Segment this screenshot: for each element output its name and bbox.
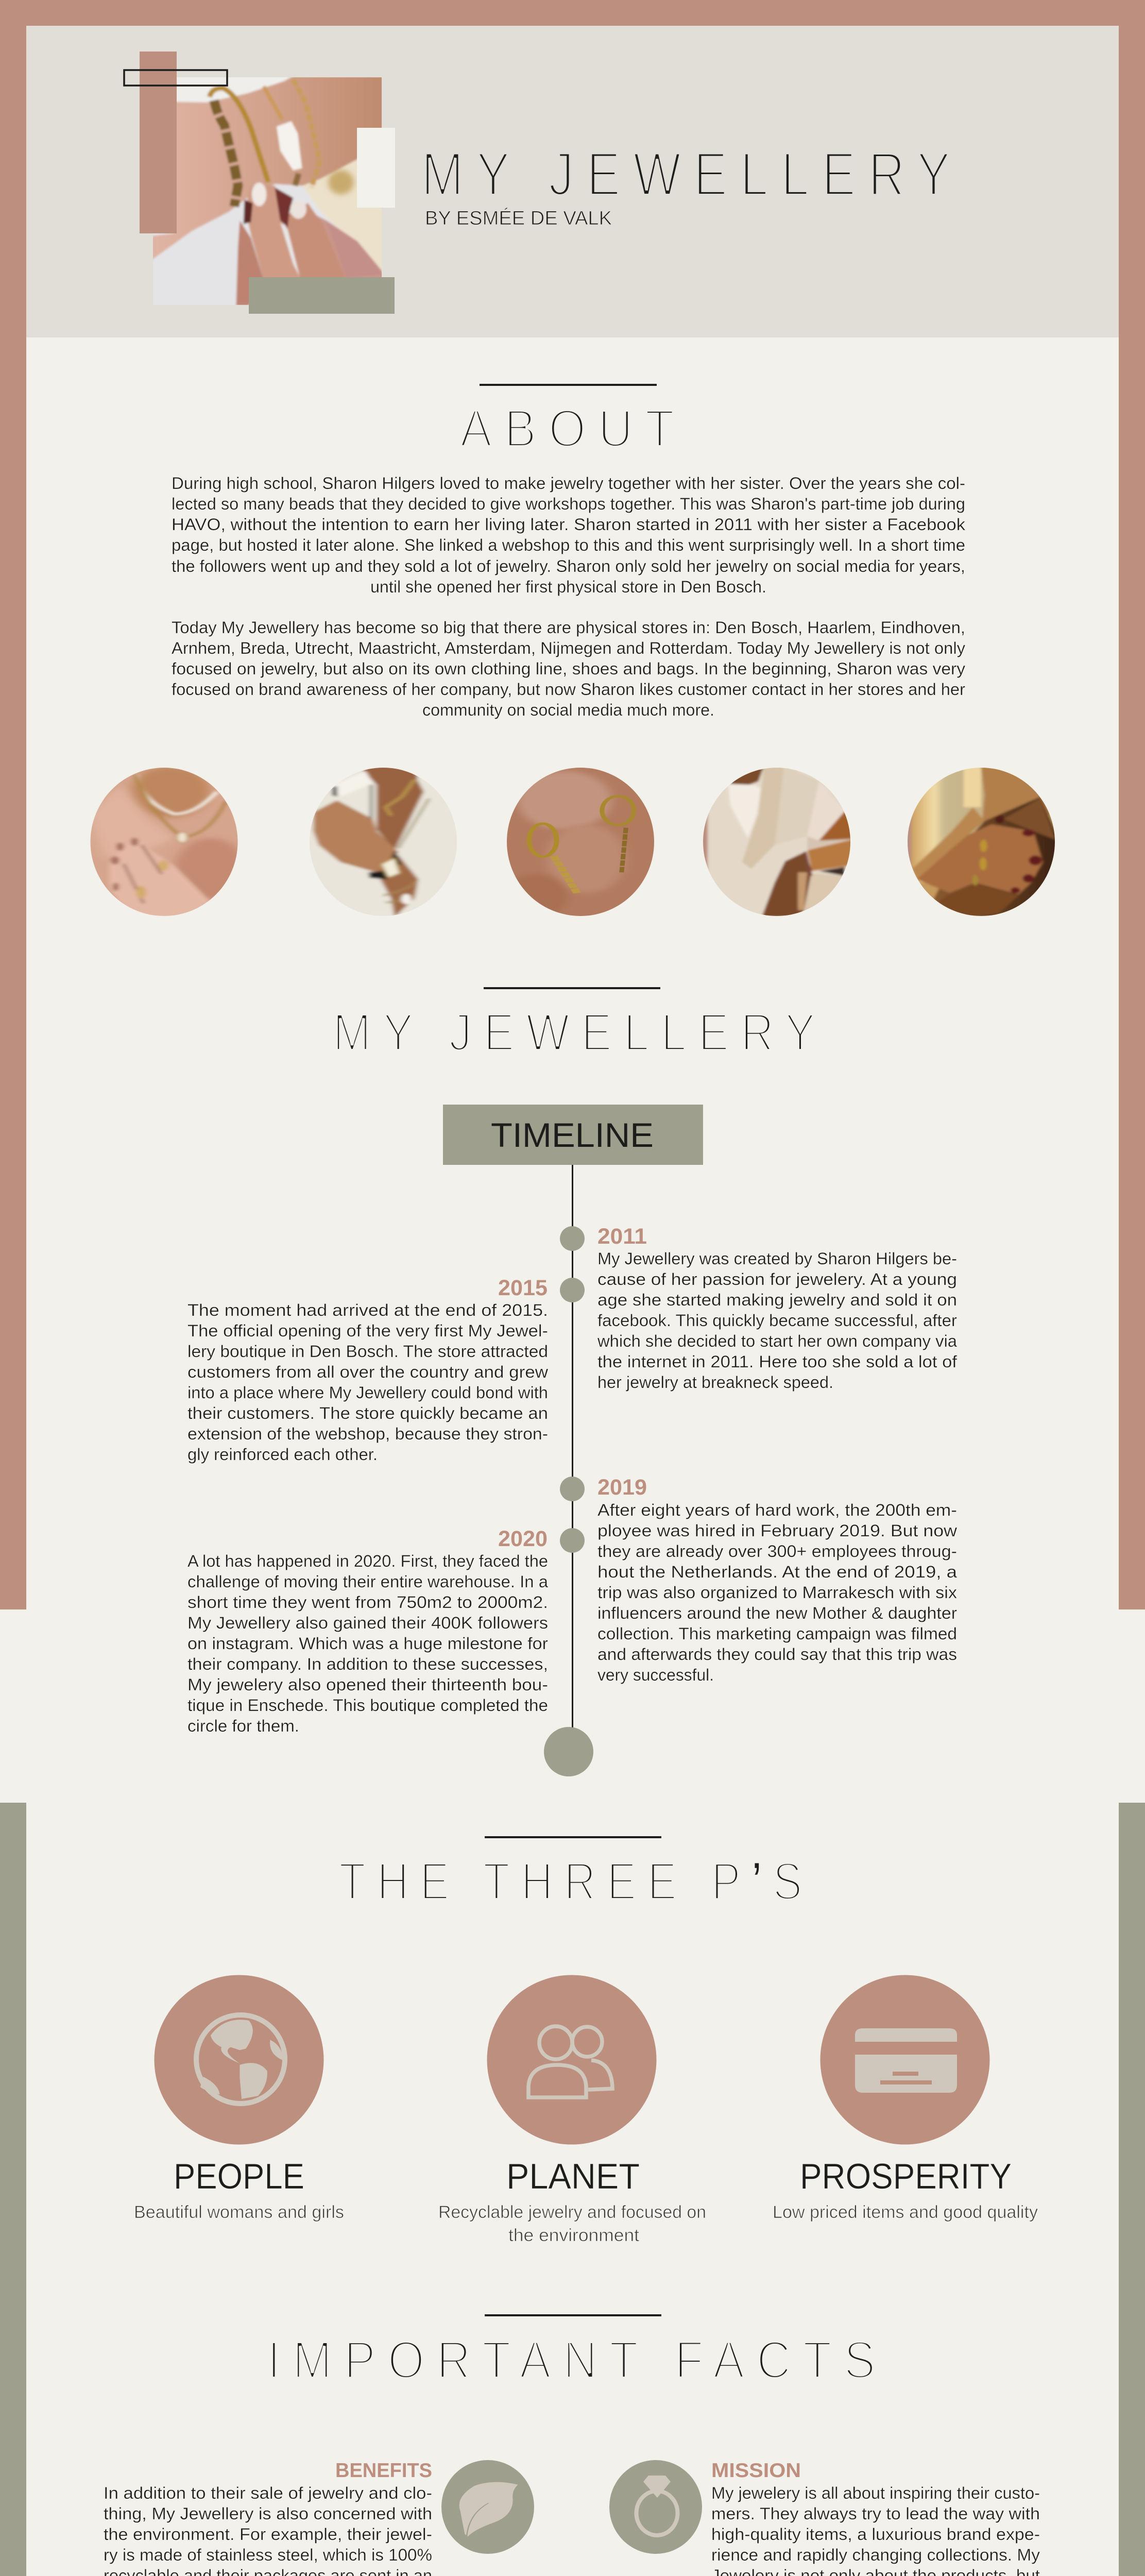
fact: mission: mers. They always try to lead the way with [711, 2504, 1040, 2523]
event: 2019 [597, 1475, 958, 1684]
photo: gold earrings on fabric [503, 766, 655, 919]
event: 2020: My Jewellery also gained their 400K followers [187, 1614, 548, 1632]
event: 2019: collection. This marketing campaign was filmed [597, 1624, 957, 1643]
timeline dots [544, 1226, 593, 1776]
event: 2020: 2020 [498, 1527, 548, 1551]
event: 2015: customers from all over the country and grew [187, 1363, 549, 1381]
heading: important facts: IMPORTANT FACTS [267, 2330, 887, 2389]
fact: mission: My jewelery is all about inspiring their custo- [711, 2484, 1040, 2502]
photo: knit vest [700, 766, 854, 917]
decorative outline box [124, 70, 227, 86]
event: 2011: her jewelry at breakneck speed. [597, 1373, 833, 1392]
text block: about paragraph one: lected so many beads that they decided to give workshops together. This was Sharon's part-time job during [172, 495, 965, 513]
event: 2020: on instagram. Which was a huge milestone for [187, 1634, 548, 1653]
description: planet: the environment [508, 2226, 640, 2245]
event: 2020: challenge of moving their entire warehouse. In a [187, 1572, 548, 1591]
photo row [88, 766, 1059, 919]
section: important facts [104, 2314, 1040, 2576]
heading: the three p's: THE THREE P’S [339, 1852, 813, 1911]
header photo: bracelets on wrist [146, 73, 389, 309]
heading: my jewellery: MY JEWELLERY [333, 1003, 827, 1062]
event: 2011: My Jewellery was created by Sharon Hilgers be- [597, 1249, 957, 1268]
text block: about paragraph one: until she opened her first physical store in Den Bosch. [370, 578, 766, 596]
photo: hand with rings [905, 766, 1059, 917]
event: 2019: After eight years of hard work, the 200th em- [597, 1501, 957, 1519]
people column [134, 1975, 344, 2222]
event: 2011: 2011 [597, 1224, 647, 1249]
text block: about paragraph two: community on social media much more. [422, 701, 714, 719]
event: 2019: very successful. [597, 1666, 714, 1684]
icon: diamond ring [637, 2476, 678, 2535]
section: the three p's [134, 1836, 1038, 2245]
timeline spine [572, 1165, 573, 1732]
heading: about: ABOUT [460, 399, 687, 458]
event: 2015: extension of the webshop, because they stron- [187, 1425, 548, 1443]
header panel [26, 26, 1119, 337]
text block: about paragraph two: Today My Jewellery has become so big that there are physical stores in: Den Bosch, Haarlem, Eindhoven, [172, 618, 965, 637]
fact: benefits: the environment. For example, their jewel- [104, 2525, 432, 2544]
fact: mission: rience and rapidly changing collections. My [711, 2546, 1040, 2564]
fact: benefits: ry is made of stainless steel, which is 100% [104, 2546, 432, 2564]
event: 2015: The official opening of the very first My Jewel- [187, 1321, 548, 1340]
event: 2015 [187, 1276, 549, 1464]
text block: about paragraph one: the followers went up and they sold a lot of jewelry. Sharon only sold her jewelry on social media for years, [172, 557, 965, 575]
event: 2020: short time they went from 750m2 to 2000m2. [187, 1593, 548, 1612]
fact: mission: MISSION [711, 2460, 801, 2482]
title: MY JEWELLERY [421, 140, 963, 209]
event: 2019: influencers around the new Mother & daughter [597, 1604, 957, 1622]
description: prosperity: Low priced items and good quality [773, 2202, 1038, 2222]
event: 2020: A lot has happened in 2020. First, they faced the [187, 1552, 548, 1570]
event: 2019: and afterwards they could say that this trip was [597, 1645, 957, 1664]
text block: about paragraph one: HAVO, without the intention to earn her living later. Sharon started in 2011 with her sister a Facebook [172, 515, 966, 534]
section: my jewellery timeline [187, 987, 958, 1776]
label: people: PEOPLE [174, 2156, 304, 2196]
event: 2011: facebook. This quickly became successful, after [597, 1311, 957, 1330]
event: 2015: their customers. The store quickly became an [187, 1404, 548, 1422]
fact: mission [609, 2460, 1040, 2576]
description: planet [438, 2202, 706, 2245]
event: 2020: their company. In addition to these successes, [187, 1655, 548, 1673]
photo: watch and white shirt [304, 766, 464, 917]
event: 2011: the internet in 2011. Here too she sold a lot of [597, 1352, 957, 1371]
event: 2011: which she decided to start her own company via [597, 1332, 957, 1350]
fact: benefits [104, 2460, 534, 2576]
fact: benefits: thing, My Jewellery is also concerned with [104, 2504, 432, 2523]
event: 2019: 2019 [597, 1475, 647, 1500]
timeline heading box [443, 1105, 703, 1165]
event: 2011: age she started making jewelry and sold it on [597, 1291, 957, 1309]
rose frame: top and sides [0, 0, 1145, 1609]
event: 2015: 2015 [498, 1276, 548, 1300]
event: 2020: My jewelery also opened their thirteenth bou- [187, 1675, 548, 1694]
description: people: Beautiful womans and girls [134, 2202, 344, 2222]
event: 2015: into a place where My Jewellery could bond with [187, 1383, 548, 1402]
text block: about paragraph two [172, 618, 965, 719]
text block: about paragraph one: During high school, Sharon Hilgers loved to make jewelry together with her sister. Over the years she col- [172, 474, 965, 493]
event: 2015: The moment had arrived at the end of 2015. [187, 1301, 548, 1319]
text block: about paragraph one [172, 474, 966, 596]
text block: about paragraph two: focused on jewelry, but also on its own clothing line, shoes and bags. In the beginning, Sharon was very [172, 659, 965, 678]
text block: about paragraph two: focused on brand awareness of her company, but now Sharon likes customer contact in her stores and her [172, 680, 965, 699]
label: planet: PLANET [506, 2156, 640, 2196]
event: 2015: lery boutique in Den Bosch. The store attracted [187, 1342, 548, 1361]
event: 2020: circle for them. [187, 1717, 299, 1735]
event: 2015: gly reinforced each other. [187, 1445, 378, 1464]
icon: two people [528, 2026, 612, 2097]
icon: globe [196, 2015, 285, 2104]
icon: leaf [459, 2482, 518, 2536]
fact: mission: high-quality items, a luxurious brand expe- [711, 2525, 1040, 2544]
event: 2019: they are already over 300+ employees throug- [597, 1542, 957, 1561]
fact: benefits: In addition to their sale of jewelry and clo- [104, 2484, 432, 2502]
icon: credit card [855, 2028, 957, 2093]
fact: benefits: BENEFITS [335, 2460, 432, 2482]
byline: BY ESMÉE DE VALK [425, 207, 612, 229]
description: planet: Recyclable jewelry and focused on [438, 2202, 706, 2222]
photo: necklace on skin [88, 766, 247, 917]
event: 2020 [187, 1527, 548, 1735]
prosperity column [773, 1975, 1038, 2222]
text block: about paragraph two: Arnhem, Breda, Utrecht, Maastricht, Amsterdam, Nijmegen and Rotterdam. Today My Jewellery is not only [172, 639, 965, 657]
decorative white bar [357, 128, 395, 208]
event: 2011 [597, 1224, 957, 1392]
sage frame: sides and bottom [0, 1803, 1145, 2576]
label: prosperity: PROSPERITY [800, 2156, 1012, 2196]
section: about [172, 384, 966, 719]
event: 2019: trip was also organized to Marrakesch with six [597, 1583, 957, 1602]
text block: about paragraph one: page, but hosted it later alone. She linked a webshop to this and this went surprisingly well. In a short time [172, 536, 965, 554]
event: 2020: tique in Enschede. This boutique completed the [187, 1696, 548, 1715]
event: 2011: cause of her passion for jewelery. At a young [597, 1270, 957, 1289]
decorative rose bar [140, 52, 177, 233]
decorative sage block [249, 277, 395, 314]
planet column [438, 1975, 706, 2245]
timeline heading box: TIMELINE [491, 1116, 654, 1154]
event: 2019: ployee was hired in February 2019. But now [597, 1521, 958, 1540]
event: 2019: hout the Netherlands. At the end of 2019, a [597, 1563, 957, 1581]
